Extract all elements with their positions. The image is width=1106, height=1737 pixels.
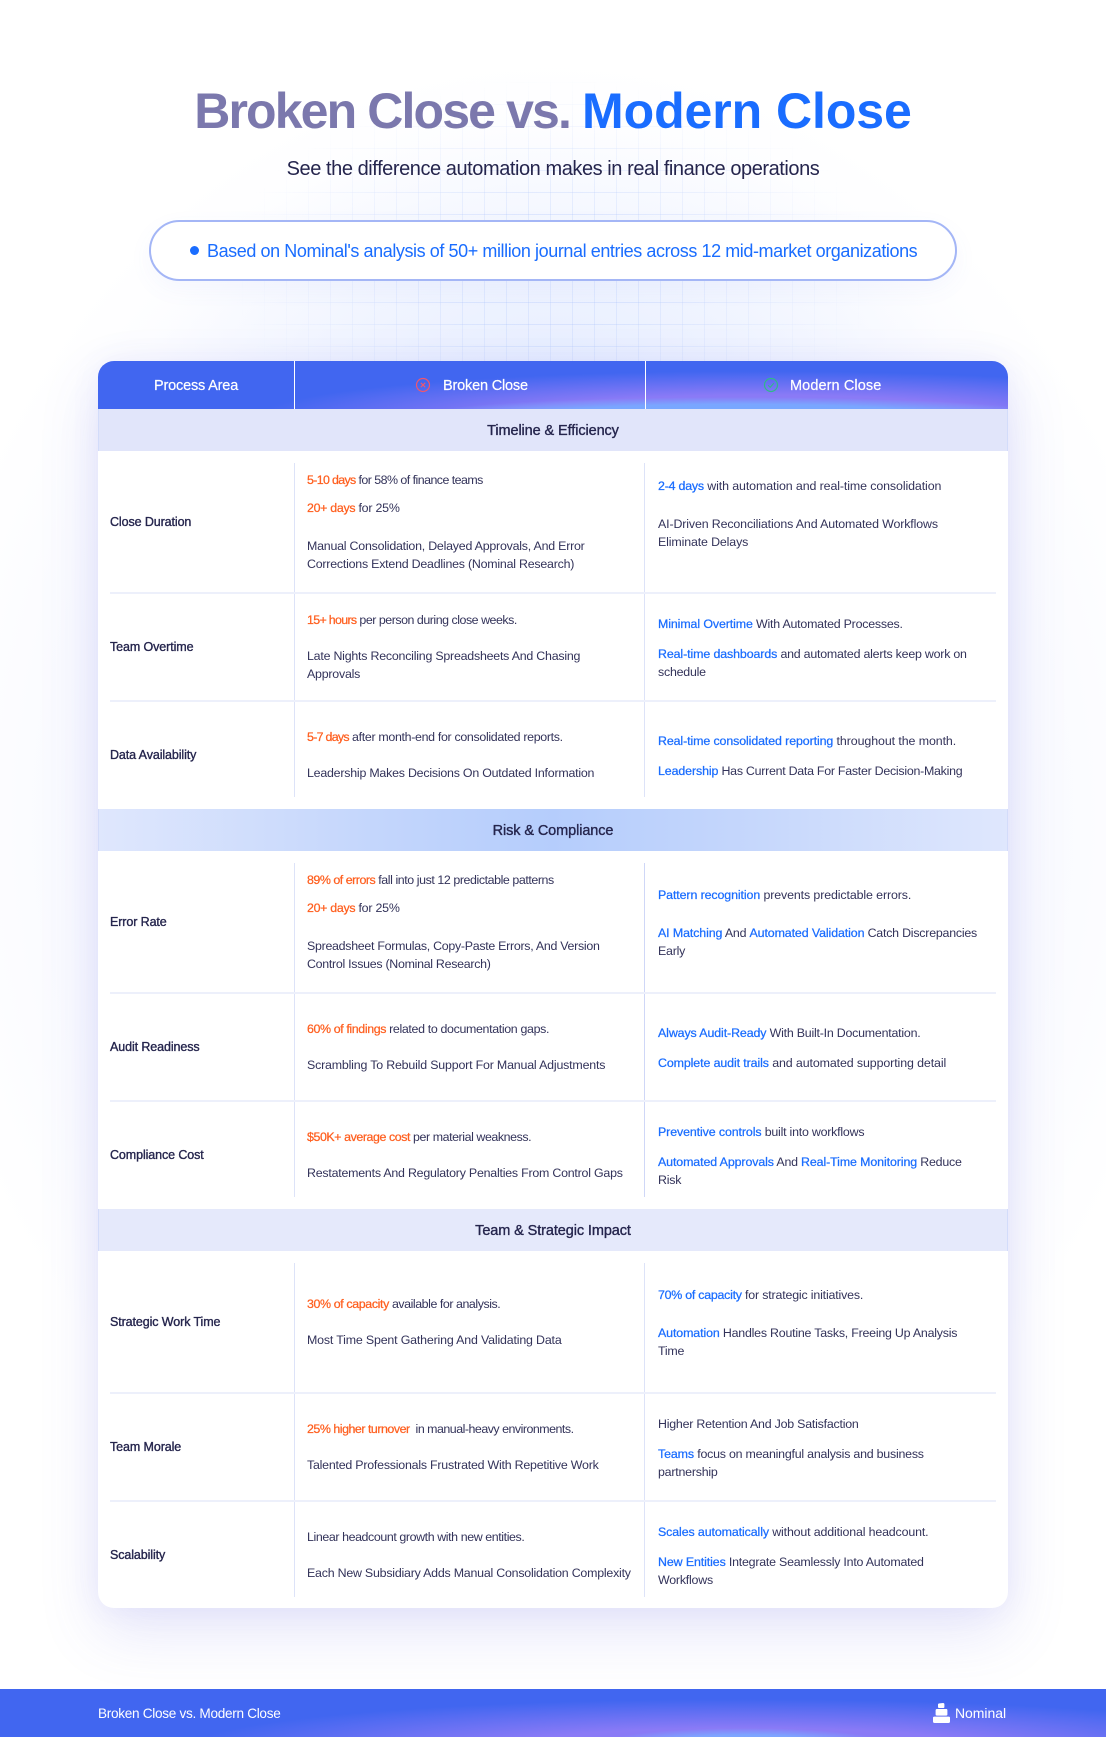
row: Team Morale — [110, 1417, 924, 1479]
broken close cell: Scrambling To Rebuild Support For Manual Adjustments — [307, 1058, 605, 1072]
column heading: Modern Close: Modern Close — [790, 378, 881, 394]
modern close cell: Automated Approvals And Real-Time Monitoring Reduce — [658, 1155, 962, 1169]
section heading: Timeline & Efficiency: Timeline & Efficiency — [487, 423, 619, 439]
broken close cell — [307, 1130, 623, 1180]
broken close cell — [307, 473, 585, 571]
row label: Audit Readiness — [110, 1040, 200, 1054]
row label: Strategic Work Time — [110, 1315, 220, 1329]
row label: Error Rate — [110, 915, 167, 929]
modern close cell: Scales automatically without additional headcount. — [658, 1525, 928, 1539]
footer bar — [0, 1689, 1106, 1737]
modern close cell: Real-time dashboards and automated alerts keep work on — [658, 647, 967, 661]
row: Scalability — [110, 1525, 928, 1587]
row: Strategic Work Time — [110, 1288, 957, 1358]
modern close cell — [658, 1417, 924, 1479]
modern close cell: Time — [658, 1344, 684, 1358]
broken close cell: 89% of errors fall into just 12 predictable patterns — [307, 873, 554, 887]
row: Audit Readiness — [110, 1022, 946, 1072]
row: Data Availability — [110, 730, 962, 780]
broken close cell: $50K+ average cost per material weakness. — [307, 1130, 531, 1144]
broken close cell: Late Nights Reconciling Spreadsheets And Chasing — [307, 649, 580, 663]
modern close cell: New Entities Integrate Seamlessly Into Automated — [658, 1555, 924, 1569]
row label: Team Morale — [110, 1440, 181, 1454]
broken close cell: 20+ days for 25% — [307, 901, 400, 915]
callout: data source pill — [149, 220, 957, 281]
panel: comparison table — [98, 361, 1008, 1608]
row: Compliance Cost — [110, 1125, 962, 1187]
broken close cell — [307, 1530, 631, 1580]
broken close cell — [307, 1297, 562, 1347]
broken close cell: 20+ days for 25% — [307, 501, 400, 515]
modern close cell — [658, 1525, 928, 1587]
broken close cell: 30% of capacity available for analysis. — [307, 1297, 500, 1311]
broken close cell — [307, 730, 594, 780]
modern close cell: Always Audit-Ready With Built-In Documentation. — [658, 1026, 920, 1040]
subtitle: See the difference automation makes in real finance operations — [287, 158, 819, 180]
modern close cell — [658, 617, 967, 679]
icon: red cross circle — [416, 378, 430, 392]
modern close cell — [658, 1288, 957, 1358]
broken close cell: 5-10 days for 58% of finance teams — [307, 473, 483, 487]
modern close cell: 70% of capacity for strategic initiatives. — [658, 1288, 863, 1302]
broken close cell: Linear headcount growth with new entities. — [307, 1530, 524, 1544]
modern close cell — [658, 479, 941, 549]
broken close cell: Each New Subsidiary Adds Manual Consolidation Complexity — [307, 1566, 631, 1580]
broken close cell — [307, 613, 580, 681]
broken close cell: 5-7 days after month-end for consolidated reports. — [307, 730, 563, 744]
table header — [98, 361, 1008, 409]
broken close cell — [307, 873, 600, 971]
callout: data source pill: Based on Nominal's analysis of 50+ million journal entries across 12 mid-market organizations — [207, 241, 917, 261]
row: Close Duration — [110, 473, 941, 571]
modern close cell — [658, 1125, 962, 1187]
modern close cell: Workflows — [658, 1573, 713, 1587]
column heading: Process Area: Process Area — [154, 378, 238, 394]
section heading: Risk & Compliance — [98, 809, 1008, 851]
row label: Team Overtime — [110, 640, 193, 654]
broken close cell: Talented Professionals Frustrated With Repetitive Work — [307, 1458, 599, 1472]
broken close cell: Manual Consolidation, Delayed Approvals, And Error — [307, 539, 585, 553]
row: Error Rate — [110, 873, 977, 971]
broken close cell — [307, 1422, 599, 1472]
broken close cell: 15+ hours per person during close weeks. — [307, 613, 517, 627]
modern close cell: Eliminate Delays — [658, 535, 748, 549]
modern close cell: Pattern recognition prevents predictable errors. — [658, 888, 911, 902]
modern close cell: Preventive controls built into workflows — [658, 1125, 864, 1139]
modern close cell: Higher Retention And Job Satisfaction — [658, 1417, 859, 1431]
broken close cell: Restatements And Regulatory Penalties From Control Gaps — [307, 1166, 623, 1180]
section heading: Timeline & Efficiency — [98, 409, 1008, 451]
section heading: Risk & Compliance: Risk & Compliance — [493, 823, 613, 839]
modern close cell: Real-time consolidated reporting throughout the month. — [658, 734, 956, 748]
icon: green check circle — [764, 378, 778, 392]
broken close cell: Corrections Extend Deadlines (Nominal Research) — [307, 557, 574, 571]
title: Broken Close vs. Modern Close — [194, 83, 912, 139]
modern close cell — [658, 734, 962, 778]
broken close cell: Spreadsheet Formulas, Copy-Paste Errors, And Version — [307, 939, 600, 953]
broken close cell: Most Time Spent Gathering And Validating Data — [307, 1333, 562, 1347]
row label: Close Duration — [110, 515, 191, 529]
modern close cell — [658, 888, 977, 958]
section heading: Team & Strategic Impact: Team & Strategic Impact — [475, 1223, 631, 1239]
broken close cell: 60% of findings related to documentation gaps. — [307, 1022, 549, 1036]
row label: Compliance Cost — [110, 1148, 204, 1162]
broken close cell: Leadership Makes Decisions On Outdated Information — [307, 766, 594, 780]
modern close cell: Early — [658, 944, 685, 958]
broken close cell: 25% higher turnover in manual-heavy environments. — [307, 1422, 574, 1436]
modern close cell: Complete audit trails and automated supporting detail — [658, 1056, 946, 1070]
modern close cell: 2-4 days with automation and real-time consolidation — [658, 479, 941, 493]
footer brand name: Nominal — [955, 1705, 1006, 1721]
modern close cell: Risk — [658, 1173, 681, 1187]
row: Team Overtime — [110, 613, 967, 681]
modern close cell: Minimal Overtime With Automated Processes. — [658, 617, 903, 631]
broken close cell: Approvals — [307, 667, 360, 681]
modern close cell: AI Matching And Automated Validation Catch Discrepancies — [658, 926, 977, 940]
broken close cell — [307, 1022, 605, 1072]
section heading: Team & Strategic Impact — [98, 1209, 1008, 1251]
row label: Data Availability — [110, 748, 196, 762]
modern close cell: Leadership Has Current Data For Faster Decision-Making — [658, 764, 962, 778]
modern close cell: AI-Driven Reconciliations And Automated Workflows — [658, 517, 938, 531]
icon: Nominal logo — [933, 1703, 950, 1723]
modern close cell: schedule — [658, 665, 706, 679]
footer title: Broken Close vs. Modern Close — [98, 1706, 280, 1721]
broken close cell: Control Issues (Nominal Research) — [307, 957, 491, 971]
modern close cell: Automation Handles Routine Tasks, Freeing Up Analysis — [658, 1326, 957, 1340]
row label: Scalability — [110, 1548, 165, 1562]
modern close cell — [658, 1026, 946, 1070]
modern close cell: partnership — [658, 1465, 718, 1479]
modern close cell: Teams focus on meaningful analysis and business — [658, 1447, 924, 1461]
column heading: Broken Close: Broken Close — [443, 378, 528, 394]
